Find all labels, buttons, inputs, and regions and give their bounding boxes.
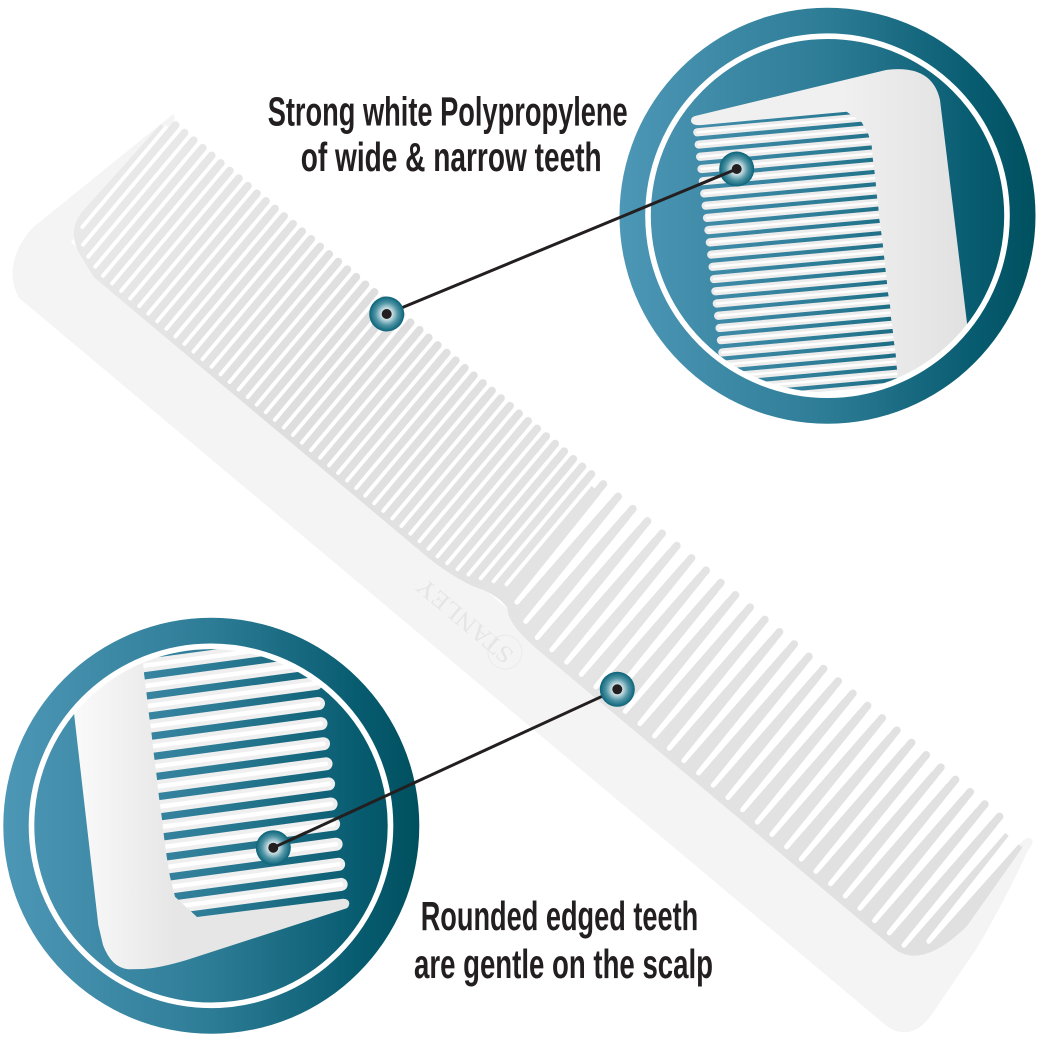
heading: polypropylene (268, 89, 628, 180)
white ring (648, 36, 1007, 395)
panel: narrow teeth magnifier (620, 8, 1036, 440)
brand mark: STANLEY (410, 568, 529, 676)
tooth tips (163, 125, 1000, 831)
brand mark: STANLEY: STANLEY (412, 572, 519, 668)
heading: polypropylene: Strong white Polypropylene (268, 89, 628, 135)
heading: rounded teeth (414, 893, 713, 987)
teeth zone (55, 122, 1029, 975)
enlarged narrow teeth (691, 69, 968, 392)
panel: rounded teeth magnifier (3, 618, 419, 1034)
callout: bottom pointer (256, 672, 635, 865)
heading: rounded teeth: are gentle on the scalp (414, 941, 713, 987)
disc (620, 8, 1036, 424)
heading: rounded teeth: Rounded edged teeth (421, 893, 698, 939)
white ring (32, 646, 390, 1005)
callout: top pointer (369, 152, 754, 332)
heading: polypropylene: of wide & narrow teeth (301, 134, 602, 180)
enlarged rounded teeth (74, 649, 350, 970)
disc (3, 618, 419, 1034)
fine tooth gaps (67, 127, 591, 602)
coarse tooth gaps (502, 493, 1019, 962)
